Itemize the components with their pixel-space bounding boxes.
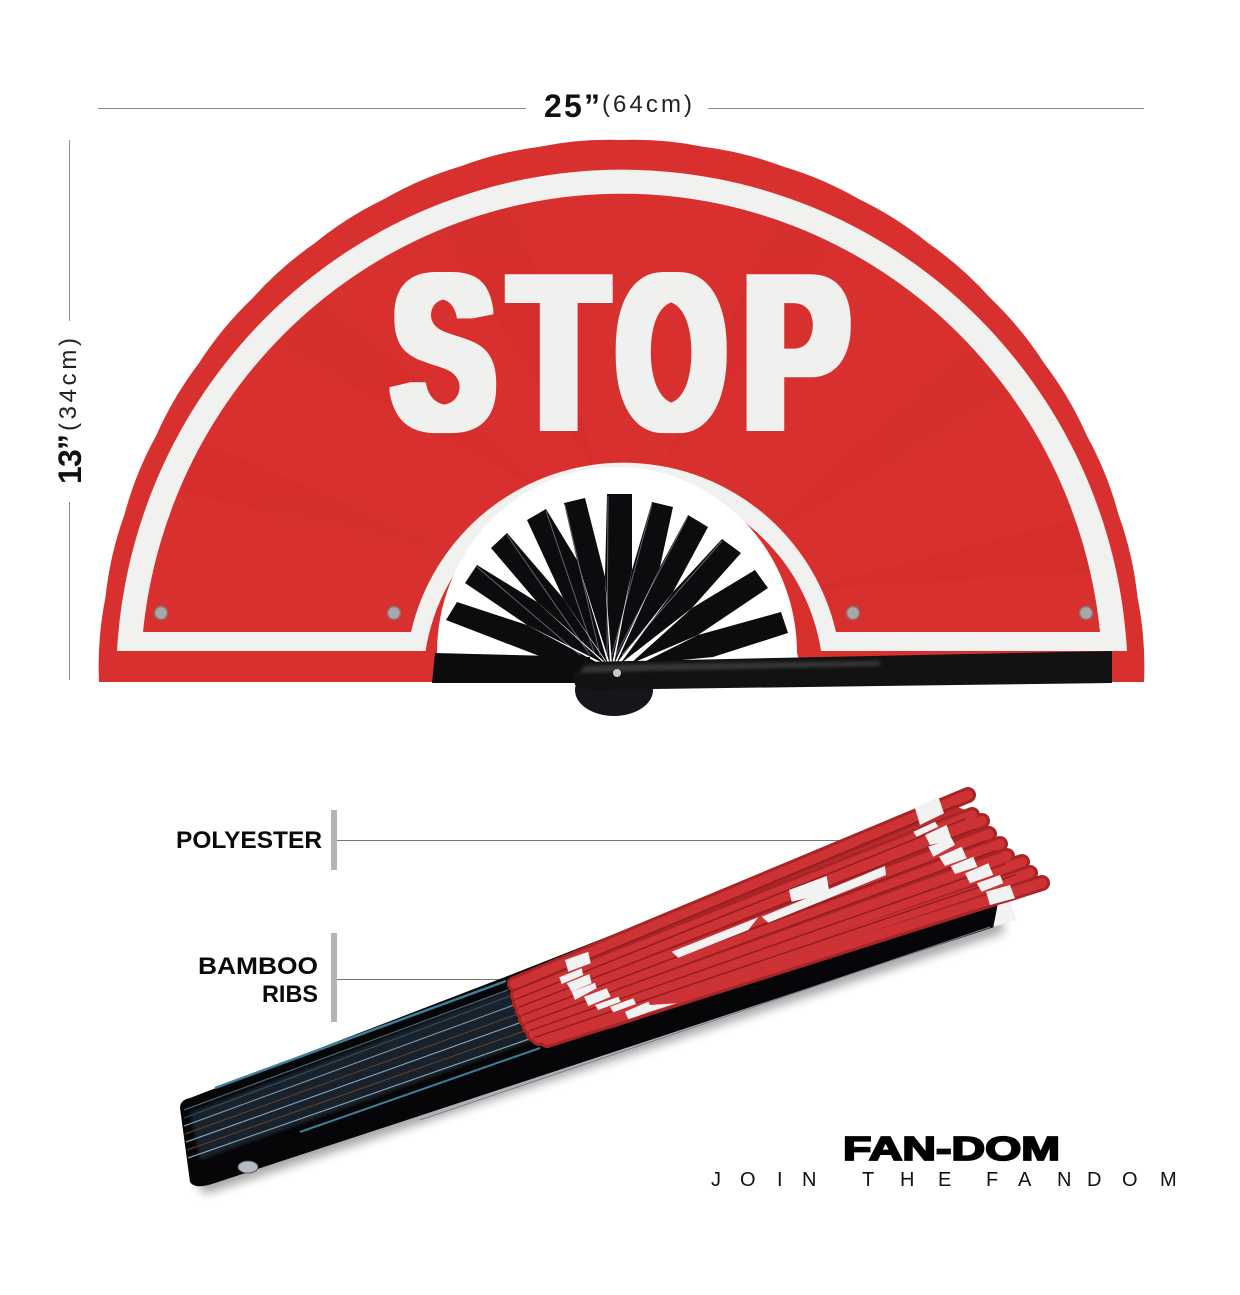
STOP lettering: S bbox=[392, 229, 495, 477]
red pleats bbox=[514, 795, 1042, 1040]
red pleat body bbox=[507, 800, 1020, 1045]
STOP lettering bbox=[392, 228, 849, 477]
brand logo: JOIN THE FANDOM bbox=[711, 1169, 1177, 1191]
STOP lettering: T bbox=[510, 228, 607, 476]
bamboo ribs label: RIBS bbox=[262, 981, 318, 1008]
pivot knob bbox=[575, 664, 653, 716]
polyester label bbox=[176, 810, 858, 870]
stick highlights bbox=[184, 927, 990, 1158]
folded fan bbox=[180, 795, 1042, 1194]
width dimension bbox=[98, 88, 1144, 124]
bamboo ribs label bbox=[198, 933, 505, 1022]
stick sheen bbox=[580, 661, 880, 673]
bamboo ribs bbox=[446, 494, 788, 664]
height dimension bbox=[52, 140, 88, 680]
rivet bbox=[238, 1161, 258, 1173]
polyester label: POLYESTER bbox=[176, 827, 322, 854]
stick sheen band bbox=[190, 990, 535, 1160]
height dimension: (34cm) bbox=[55, 338, 82, 431]
white pleat marks bbox=[559, 797, 1017, 1019]
drop shadow bbox=[195, 918, 1005, 1194]
width dimension: 25” bbox=[544, 88, 600, 124]
pivot pin bbox=[613, 669, 621, 677]
left guard stick bbox=[432, 653, 590, 683]
right guard stick bbox=[573, 651, 1112, 690]
STOP lettering: O bbox=[618, 230, 725, 477]
fan canopy bbox=[99, 140, 1144, 682]
width dimension: (64cm) bbox=[602, 91, 692, 118]
open fan bbox=[99, 140, 1144, 716]
bamboo ribs label: BAMBOO bbox=[198, 953, 318, 980]
infographic canvas bbox=[58, 94, 1176, 1198]
hub opening bbox=[434, 467, 800, 665]
brand logo bbox=[711, 1130, 1177, 1191]
black sticks bbox=[180, 890, 1000, 1186]
brand logo: FAN-DOM bbox=[843, 1130, 1060, 1167]
fabric folds bbox=[130, 155, 1125, 590]
STOP lettering: P bbox=[744, 228, 849, 476]
red inner panel bbox=[143, 194, 1100, 632]
rib highlights bbox=[477, 496, 722, 655]
height dimension: 13” bbox=[52, 434, 88, 484]
rivets bbox=[154, 606, 1092, 620]
white border band bbox=[117, 170, 1127, 651]
